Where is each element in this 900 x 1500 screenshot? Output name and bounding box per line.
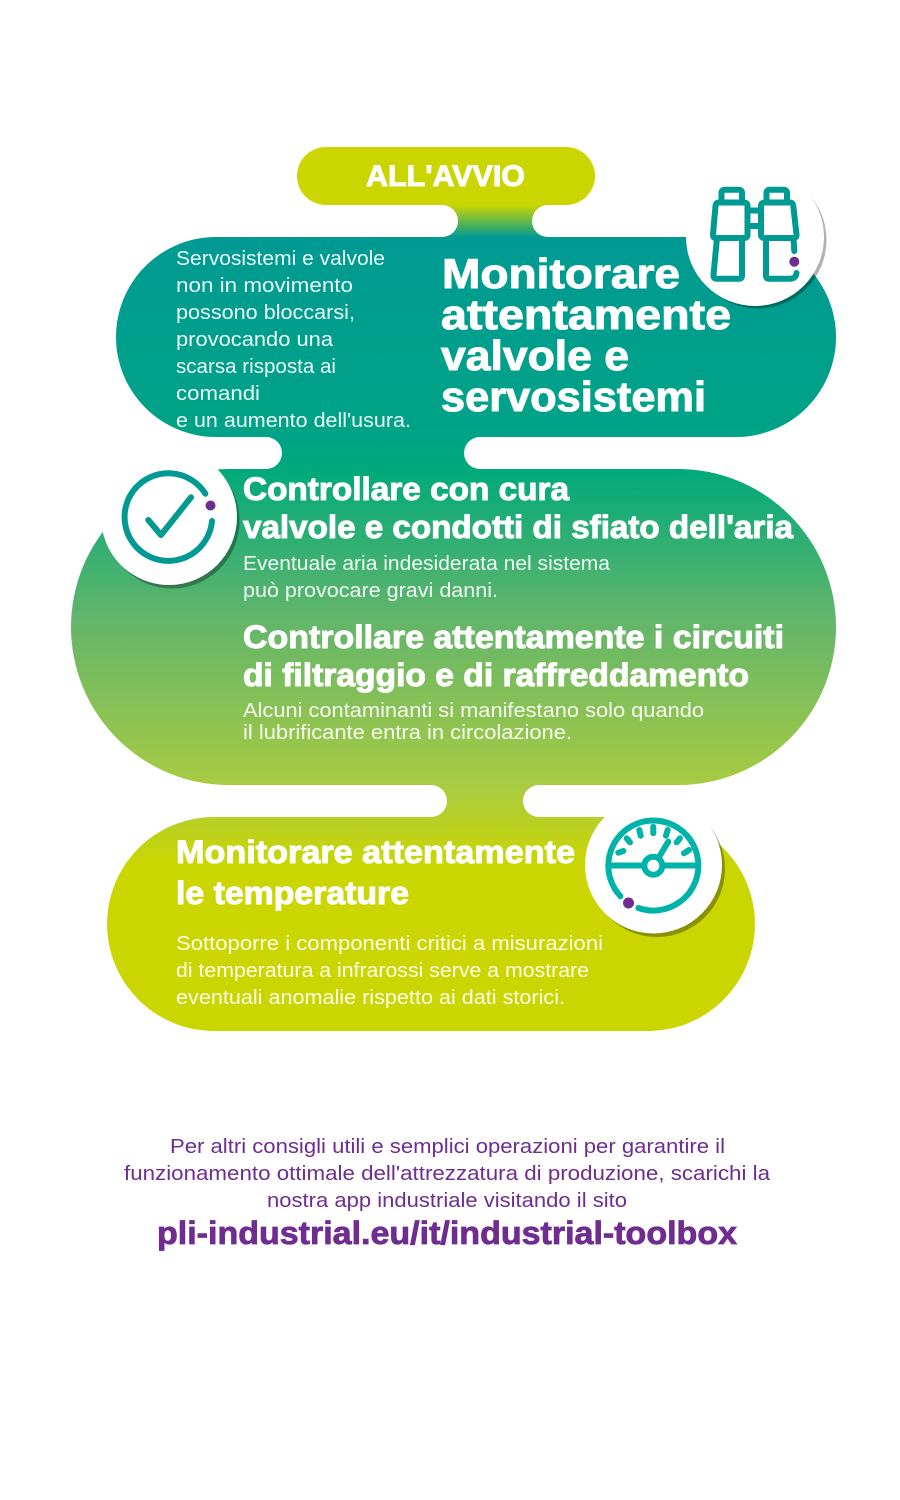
panel 1: title: attentamente xyxy=(441,291,731,338)
panel 2: section one text xyxy=(243,553,611,602)
panel 1: body text xyxy=(176,248,411,432)
panel 1: body text: e un aumento dell'usura. xyxy=(176,410,411,432)
panel 2: section one text: può provocare gravi danni. xyxy=(243,580,498,602)
icon: binoculars xyxy=(686,168,826,308)
panel 1: title: servosistemi xyxy=(441,373,706,420)
panel 2: section two heading: Controllare attentamente i circuiti xyxy=(243,619,784,655)
panel 1: title xyxy=(441,250,731,420)
panel 2: section one heading xyxy=(243,471,793,545)
panel 2: section one heading: valvole e condotti di sfiato dell'aria xyxy=(243,509,793,545)
icon: gauge xyxy=(585,796,725,937)
panel 1: title: Monitorare xyxy=(442,250,680,297)
panel 3: body text: eventuali anomalie rispetto ai dati storici. xyxy=(176,987,565,1009)
panel 2: section two text: Alcuni contaminanti si manifestano solo quando xyxy=(243,700,704,722)
footer: website link: pli-industrial.eu/it/industrial-toolbox xyxy=(157,1215,737,1251)
panel 1: body text: possono bloccarsi, xyxy=(176,302,355,324)
panel 3: heading: Monitorare attentamente xyxy=(176,834,575,870)
footer: call to action text: nostra app industriale visitando il sito xyxy=(267,1190,627,1212)
panel 3: body text: Sottoporre i componenti critici a misurazioni xyxy=(176,933,603,955)
panel 3: body text: di temperatura a infrarossi serve a mostrare xyxy=(176,960,589,982)
panel 1: title: valvole e xyxy=(441,332,629,379)
panel 3: body text xyxy=(176,933,603,1009)
footer: call to action text: Per altri consigli utili e semplici operazioni per garantire il xyxy=(170,1136,725,1158)
panel 2: section two heading: di filtraggio e di raffreddamento xyxy=(243,657,749,693)
panel 3: heading xyxy=(176,834,575,911)
panel 1: body text: scarsa risposta ai xyxy=(176,356,336,378)
panel 2: section two text xyxy=(243,700,704,744)
panel 2: section one text: Eventuale aria indesiderata nel sistema xyxy=(243,553,611,575)
heading: ALL'AVVIO: ALL'AVVIO xyxy=(366,160,525,193)
footer: call to action text xyxy=(124,1136,771,1212)
panel 3: heading: le temperature xyxy=(176,875,409,911)
icon: check mark xyxy=(101,449,240,588)
footer: call to action text: funzionamento ottimale dell'attrezzatura di produzione, scarichi la xyxy=(124,1163,771,1185)
panel 1: body text: non in movimento xyxy=(176,275,353,297)
panel 2: section two text: il lubrificante entra in circolazione. xyxy=(243,722,572,744)
panel 2: section two heading xyxy=(243,619,784,693)
panel 2: section one heading: Controllare con cura xyxy=(243,471,569,507)
panel 1: body text: Servosistemi e valvole xyxy=(176,248,385,270)
flow shape: header pill and three connected panels xyxy=(71,147,836,1031)
panel 1: body text: provocando una xyxy=(176,329,334,351)
panel 1: body text: comandi xyxy=(176,383,260,405)
